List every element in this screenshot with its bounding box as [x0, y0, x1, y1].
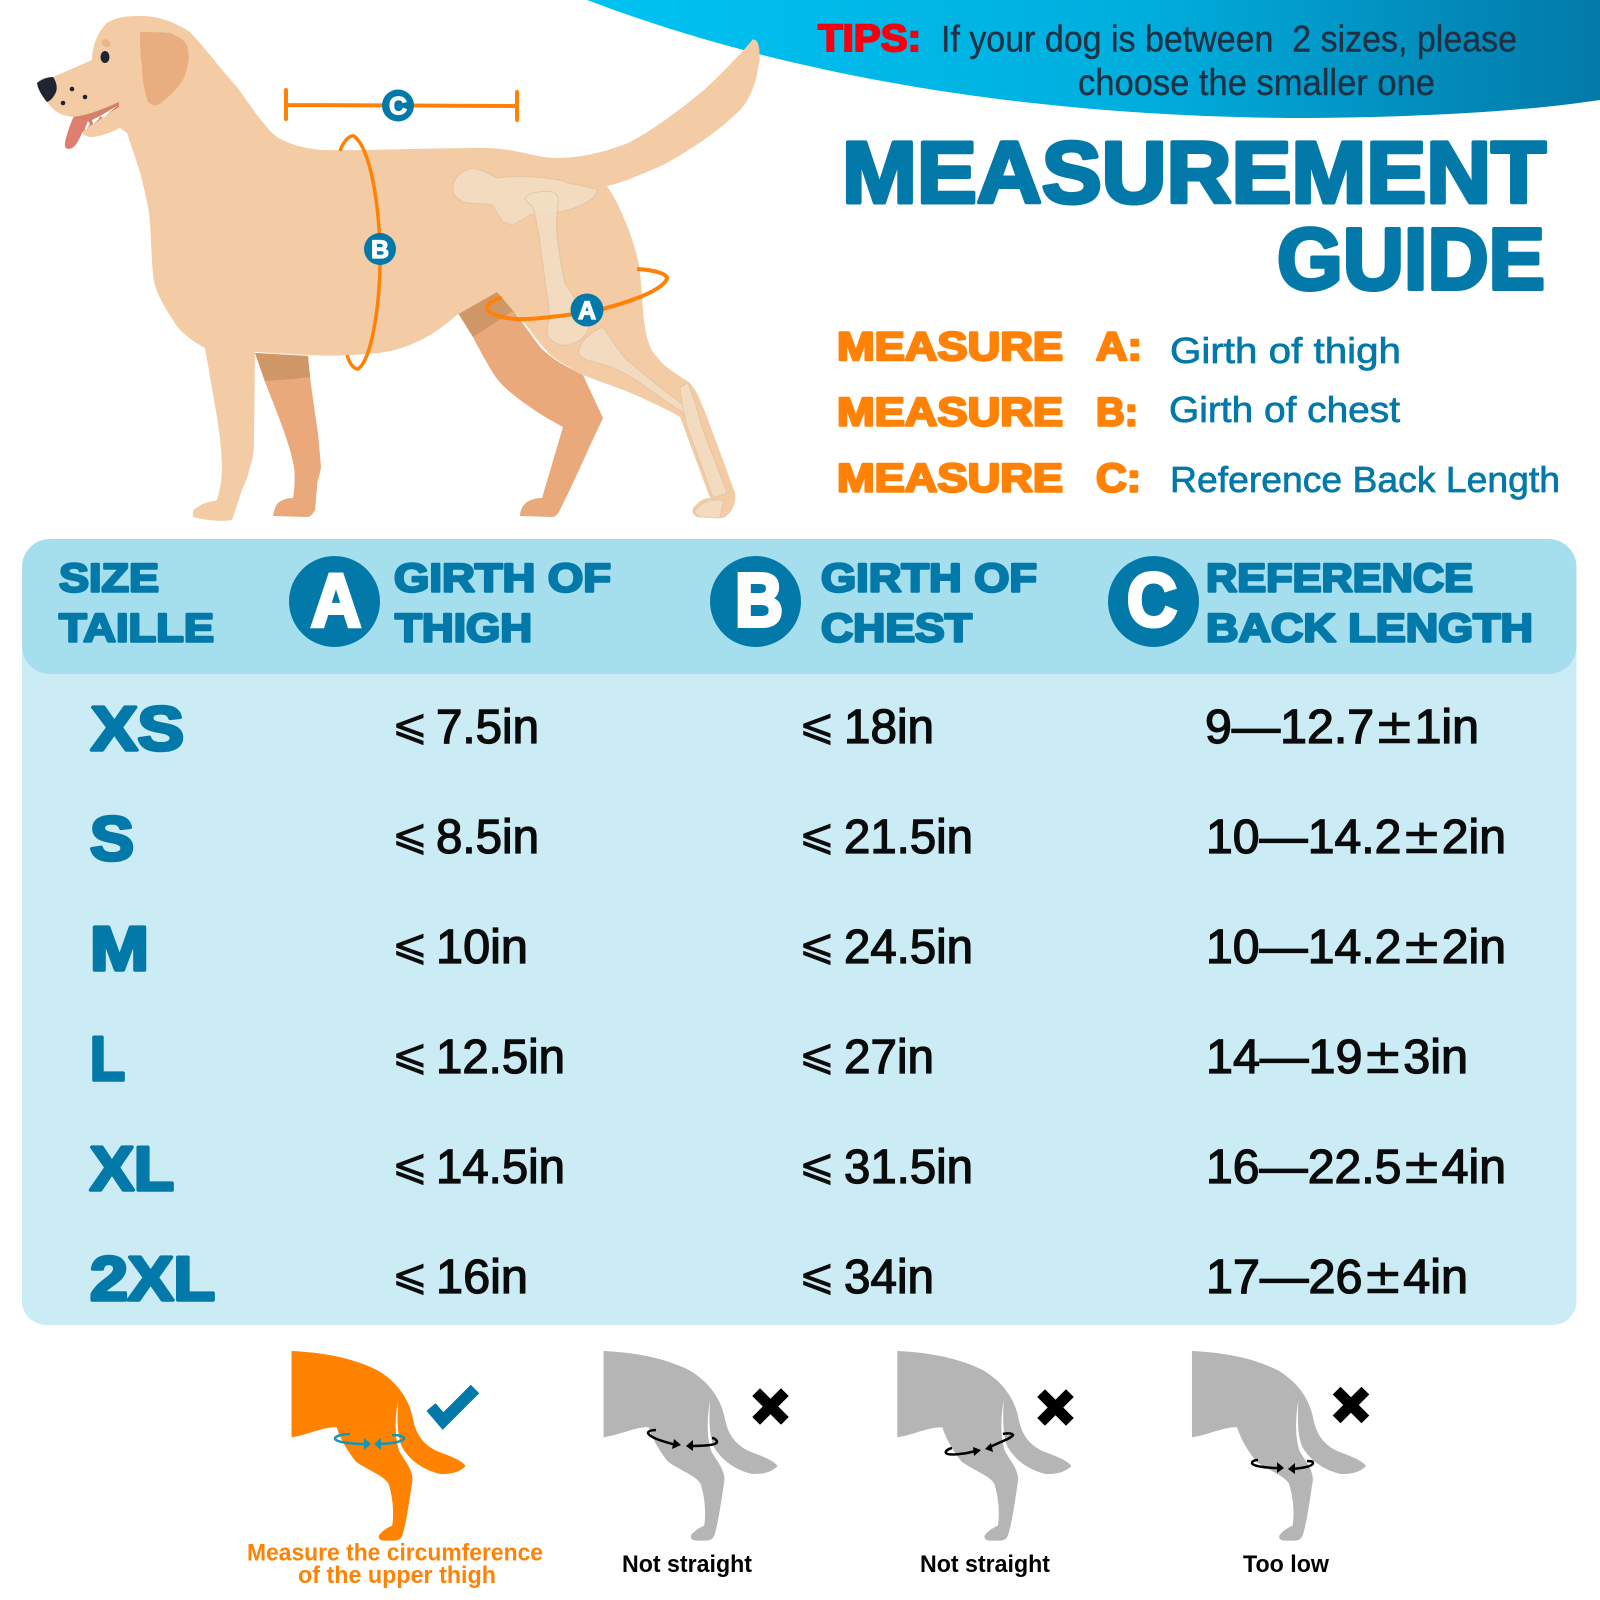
row XL: ⩽	[392, 1140, 428, 1190]
row S: ⩽	[392, 810, 428, 860]
whisker dots	[61, 87, 87, 105]
title: MEASUREMENT	[842, 124, 1546, 222]
tips text: If your dog is between 2 sizes, please	[941, 18, 1517, 60]
row XS: 18in	[844, 701, 934, 754]
header: column A: THIGH	[395, 606, 532, 650]
tips text	[818, 18, 1517, 103]
header: column C: BACK LENGTH	[1206, 606, 1533, 650]
measure legend: MEASURE	[837, 390, 1063, 434]
header: column B: B	[735, 558, 783, 642]
row XS: XS	[91, 695, 184, 764]
wrong example 3: too low	[1192, 1351, 1366, 1578]
row 2XL: 34in	[844, 1251, 934, 1304]
row XS: 9—12.7±1in	[1205, 699, 1479, 755]
far front leg	[255, 353, 321, 517]
caption: of the upper thigh	[298, 1562, 496, 1589]
row 2XL	[90, 1245, 1468, 1314]
title	[842, 124, 1546, 308]
row M: ⩽	[392, 920, 428, 970]
row S: 10—14.2±2in	[1206, 809, 1506, 865]
caption: Measure the circumference	[247, 1540, 543, 1566]
row L: 27in	[844, 1031, 934, 1084]
row M: 10—14.2±2in	[1206, 919, 1506, 975]
measure legend: MEASURE	[837, 325, 1063, 369]
measure ring B	[340, 136, 396, 369]
row XL: ⩽	[799, 1140, 835, 1190]
row L	[90, 1025, 1468, 1094]
teeth	[83, 106, 117, 130]
table header	[22, 539, 1576, 674]
row 2XL: ⩽	[392, 1250, 428, 1300]
measure legend	[837, 325, 1560, 500]
measuring arrows	[1252, 1460, 1313, 1474]
measure legend: Reference Back Length	[1170, 459, 1560, 500]
row 2XL: 2XL	[90, 1245, 215, 1314]
measure ring A	[487, 269, 667, 326]
measure ring A: A	[578, 297, 596, 325]
header: column C: REFERENCE	[1206, 556, 1473, 600]
far back leg shadow	[458, 292, 513, 337]
measuring arrows	[946, 1433, 1013, 1456]
row S: ⩽	[799, 810, 835, 860]
row XS: ⩽	[799, 700, 835, 750]
row XL: 14.5in	[436, 1141, 565, 1194]
caption	[247, 1540, 543, 1589]
caption: Not straight	[920, 1551, 1050, 1578]
row XS: 7.5in	[436, 701, 539, 754]
mouth	[73, 102, 119, 131]
row XL: XL	[90, 1135, 174, 1204]
tips banner	[587, 0, 1600, 118]
title: GUIDE	[1277, 211, 1545, 308]
row L: L	[90, 1025, 125, 1094]
row XL: 31.5in	[844, 1141, 973, 1194]
row 2XL: 17—26±4in	[1206, 1249, 1468, 1305]
gray leg	[604, 1351, 778, 1541]
row S: S	[90, 805, 134, 874]
wrong example 2: not straight	[897, 1351, 1071, 1578]
header: size: TAILLE	[59, 606, 214, 650]
measure legend: Girth of chest	[1169, 389, 1400, 430]
caption: Not straight	[622, 1551, 752, 1578]
gray leg	[897, 1351, 1071, 1541]
tips text: TIPS:	[818, 18, 921, 60]
header: column B	[710, 556, 1037, 650]
dog illustration	[37, 16, 760, 521]
cross mark	[760, 1396, 781, 1417]
measure legend: A:	[1096, 325, 1142, 369]
brow	[100, 37, 112, 49]
table body panel	[22, 600, 1576, 1325]
nose	[37, 77, 57, 102]
orange leg	[292, 1351, 466, 1541]
row XL	[90, 1135, 1506, 1204]
check mark	[431, 1389, 475, 1421]
correct example: upper thigh	[247, 1351, 543, 1589]
header: column C: C	[1127, 558, 1177, 642]
header: column B: GIRTH OF	[821, 556, 1037, 600]
header: column A: GIRTH OF	[394, 556, 611, 600]
header: size	[59, 556, 214, 650]
measure line C: C	[389, 92, 407, 120]
far back leg	[458, 292, 603, 517]
row M	[90, 915, 1506, 984]
row S	[90, 805, 1506, 874]
row 2XL: ⩽	[799, 1250, 835, 1300]
row XS	[91, 695, 1479, 764]
row L: 12.5in	[436, 1031, 565, 1084]
measure legend: C:	[1096, 456, 1141, 500]
skeleton bones	[453, 168, 727, 518]
row M: M	[90, 915, 149, 984]
row M: 24.5in	[844, 921, 973, 974]
far front leg shadow	[255, 353, 310, 381]
header: size: SIZE	[59, 556, 159, 600]
row S: 8.5in	[436, 811, 539, 864]
header: column A	[289, 556, 611, 650]
row XL: 16—22.5±4in	[1206, 1139, 1506, 1195]
row XS: ⩽	[392, 700, 428, 750]
row M: 10in	[436, 921, 528, 974]
header: column A: A	[311, 558, 361, 642]
wrong example 1: not straight	[604, 1351, 781, 1578]
measure line C	[286, 90, 517, 122]
gray leg	[1192, 1351, 1366, 1541]
row 2XL: 16in	[436, 1251, 528, 1304]
header: column C	[1108, 556, 1533, 650]
measure legend: Girth of thigh	[1170, 330, 1401, 371]
measuring arrows	[335, 1434, 404, 1450]
measure legend: MEASURE	[837, 456, 1063, 500]
tongue	[65, 118, 88, 149]
row L: ⩽	[392, 1030, 428, 1080]
row M: ⩽	[799, 920, 835, 970]
row L: 14—19±3in	[1206, 1029, 1468, 1085]
measuring arrows	[648, 1430, 717, 1451]
dog body	[37, 16, 760, 521]
row S: 21.5in	[844, 811, 973, 864]
measure legend: B:	[1096, 390, 1138, 434]
ear	[140, 32, 189, 105]
header: column B: CHEST	[821, 606, 972, 650]
row L: ⩽	[799, 1030, 835, 1080]
caption: Too low	[1243, 1551, 1329, 1578]
measure ring B: B	[371, 236, 389, 264]
cross mark	[1340, 1394, 1362, 1416]
tips text: choose the smaller one	[1078, 62, 1435, 103]
cross mark	[1045, 1397, 1066, 1418]
eye	[100, 51, 110, 63]
